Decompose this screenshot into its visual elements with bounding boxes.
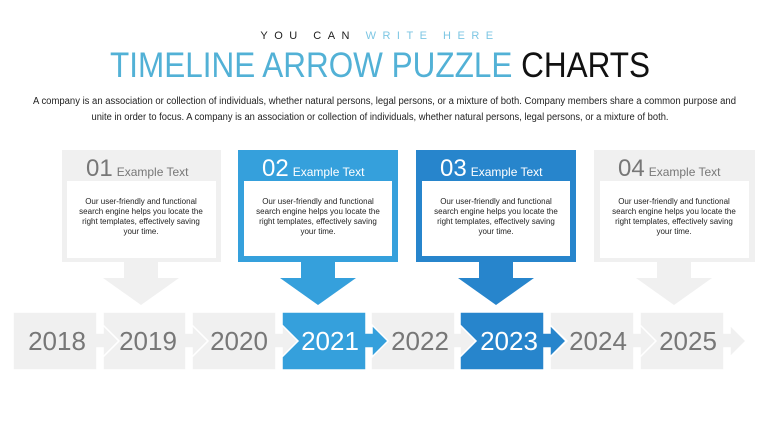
title: TIMELINE ARROW PUZZLE CHARTS xyxy=(110,46,650,85)
piece 2018 xyxy=(13,312,119,370)
card 04 xyxy=(594,150,755,262)
card 02: your time. xyxy=(300,227,336,236)
arrow 01 xyxy=(103,262,179,305)
arrow 02 xyxy=(280,262,356,305)
intro paragraph: unite in order to focus. A company is an association or collection of individuals, whether natural persons, legal persons, or a mixture of both. xyxy=(92,112,668,123)
piece 2022 xyxy=(371,312,476,370)
piece 2025: 2025 xyxy=(659,326,717,356)
arrow 04 xyxy=(636,262,712,305)
piece 2023 xyxy=(460,312,566,370)
intro paragraph xyxy=(33,96,736,123)
piece 2024 xyxy=(550,312,656,370)
card 01: your time. xyxy=(123,227,159,236)
card 03: your time. xyxy=(478,227,514,236)
piece 2020 xyxy=(192,312,298,370)
card 04: 04 Example Text xyxy=(618,155,721,182)
puzzle timeline xyxy=(13,312,746,370)
piece 2019 xyxy=(103,312,208,370)
subtitle: YOU CAN WRITE HERE xyxy=(260,30,500,42)
card 01: right templates, effectively saving xyxy=(82,217,200,226)
card 01 xyxy=(62,150,221,262)
card 04: your time. xyxy=(656,227,692,236)
card 01: search engine helps you locate the xyxy=(79,207,203,216)
card 04: right templates, effectively saving xyxy=(615,217,733,226)
card 03: right templates, effectively saving xyxy=(437,217,555,226)
intro paragraph: A company is an association or collection of individuals, whether natural persons, legal persons, or a mixture of both. Company members share a common purpose and xyxy=(33,96,736,107)
piece 2022: 2022 xyxy=(391,326,449,356)
card 02: 02 Example Text xyxy=(262,155,365,182)
card 02: Our user-friendly and functional xyxy=(262,197,374,206)
piece 2025 xyxy=(640,312,746,370)
piece 2024: 2024 xyxy=(569,326,627,356)
card 02: search engine helps you locate the xyxy=(256,207,380,216)
card 03: search engine helps you locate the xyxy=(434,207,558,216)
piece 2023: 2023 xyxy=(480,326,538,356)
card 04: search engine helps you locate the xyxy=(612,207,736,216)
piece 2019: 2019 xyxy=(119,326,177,356)
card 02 xyxy=(238,150,398,262)
card 01: Our user-friendly and functional xyxy=(85,197,197,206)
card 03 xyxy=(416,150,576,262)
piece 2020: 2020 xyxy=(210,326,268,356)
card 03: 03 Example Text xyxy=(440,155,543,182)
piece 2021 xyxy=(282,312,388,370)
piece 2018: 2018 xyxy=(28,326,86,356)
piece 2021: 2021 xyxy=(301,326,359,356)
card 02: right templates, effectively saving xyxy=(259,217,377,226)
card 04: Our user-friendly and functional xyxy=(618,197,730,206)
card 01: 01 Example Text xyxy=(86,155,189,182)
card 03: Our user-friendly and functional xyxy=(440,197,552,206)
arrow 03 xyxy=(458,262,534,305)
